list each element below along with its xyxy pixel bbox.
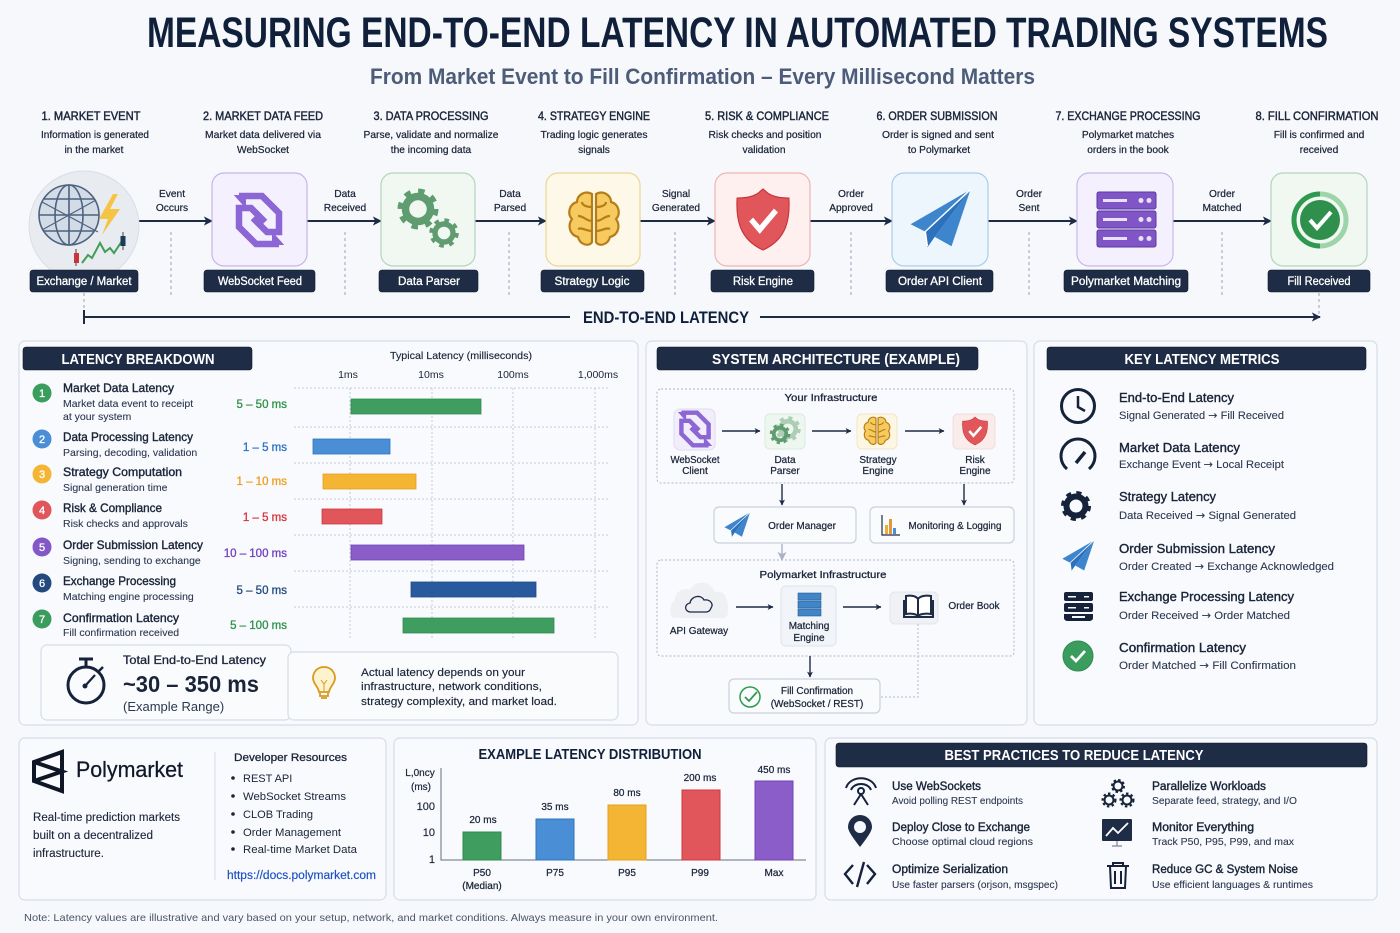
panel: key latency metrics	[1034, 341, 1377, 725]
flow arrows	[139, 220, 1271, 222]
node: websocket client: Client	[682, 466, 708, 477]
row: order submission latency: Signing, sending to exchange	[63, 555, 201, 567]
icon: stopwatch	[68, 659, 104, 703]
node labels: Strategy Logic	[554, 276, 630, 288]
chart tick labels: 100ms	[497, 369, 529, 381]
practice: reduce gc: Use efficient languages & runtimes	[1152, 879, 1313, 891]
node labels: Exchange / Market	[36, 276, 132, 288]
row: strategy computation: Signal generation time	[63, 482, 168, 494]
step 3 heading: the incoming data	[391, 145, 472, 156]
list: developer resources: CLOB Trading	[243, 809, 313, 821]
metric: market data	[1061, 439, 1284, 471]
row: data processing latency	[32, 430, 390, 459]
row: market data latency: 5 – 50 ms	[236, 399, 287, 411]
step 3 heading: Parse, validate and normalize	[364, 130, 499, 141]
step 2 heading	[203, 109, 323, 156]
node: api gateway: API Gateway	[670, 626, 728, 637]
row: market data latency: Market data event to receipt	[63, 398, 193, 410]
node: matching engine: Engine	[793, 633, 825, 644]
step 8 heading	[1256, 109, 1378, 156]
metric: end-to-end: Signal Generated → Fill Received	[1119, 409, 1284, 422]
icon tile: websocket	[212, 173, 307, 266]
bar chart: distribution: P50	[473, 868, 491, 879]
bar chart: distribution: 200 ms	[684, 773, 716, 784]
bar chart: distribution: P95	[618, 868, 636, 879]
node: fill confirmation	[729, 679, 880, 713]
node: api gateway	[670, 583, 728, 637]
panel: latency breakdown	[19, 341, 638, 725]
step 6 heading	[876, 109, 998, 156]
logo: polymarket	[34, 752, 184, 791]
node: risk engine	[953, 414, 995, 477]
row: exchange processing: 5 – 50 ms	[236, 585, 287, 597]
node labels: Polymarket Matching	[1071, 276, 1181, 288]
metric: market data: Market Data Latency	[1119, 441, 1241, 455]
step 5 heading	[705, 109, 829, 156]
node: data parser: Data	[774, 455, 796, 466]
row: risk and compliance: Risk & Compliance	[63, 501, 162, 515]
node: strategy engine: Strategy	[859, 455, 897, 466]
practice: monitor	[1102, 819, 1295, 848]
chart tick labels	[338, 369, 618, 381]
metric: order submission	[1062, 540, 1334, 573]
row: risk and compliance	[32, 500, 382, 530]
link: docs: https://docs.polymarket.com	[227, 870, 376, 882]
node: websocket client: WebSocket	[670, 455, 720, 466]
node: data parser	[765, 414, 805, 477]
icon tile: data parser gears	[381, 173, 475, 266]
step 8 heading: 8. FILL CONFIRMATION	[1256, 109, 1378, 123]
practice: serialization: Optimize Serialization	[892, 864, 1008, 876]
step 3 heading	[364, 109, 499, 156]
list: developer resources: Real-time Market Data	[243, 844, 358, 856]
icon tile: risk shield	[715, 173, 810, 266]
arrow labels: Event	[159, 189, 185, 200]
callout: latency note	[288, 652, 618, 720]
logo: polymarket: Polymarket	[76, 757, 184, 782]
step 5 heading: validation	[742, 145, 786, 156]
icon tile: fill check	[1271, 173, 1367, 266]
callout: latency note: infrastructure, network conditions,	[361, 681, 542, 693]
step 7 heading	[1056, 109, 1200, 156]
step 1 heading: Information is generated	[41, 130, 149, 141]
list: developer resources: Order Management	[243, 827, 341, 839]
step 4 heading: signals	[578, 145, 610, 156]
node: matching engine: Matching	[789, 621, 829, 632]
subtitle: From Market Event to Fill Confirmation – Every Millisecond Matters	[370, 64, 1035, 89]
step 2 heading: Market data delivered via	[205, 130, 321, 141]
row: data processing latency: 1 – 5 ms	[243, 442, 287, 454]
node: monitoring and logging	[870, 507, 1014, 543]
row: market data latency: 1	[39, 388, 45, 400]
step 5 heading: 5. RISK & COMPLIANCE	[705, 109, 829, 123]
bar chart: distribution: L,0ncy	[405, 768, 435, 779]
list: developer resources	[231, 752, 358, 856]
group: polymarket infrastructure: Polymarket Infrastructure	[760, 569, 887, 581]
practice: serialization	[845, 862, 1058, 891]
metric: end-to-end: End-to-End Latency	[1119, 391, 1235, 405]
node labels: Data Parser	[398, 276, 460, 288]
node: order manager: Order Manager	[768, 521, 837, 532]
bar chart: distribution: (Median)	[462, 881, 502, 892]
text: description	[33, 812, 180, 860]
step 1 heading	[41, 109, 149, 156]
heading: system architecture	[657, 347, 978, 370]
node: risk engine: Engine	[959, 466, 991, 477]
row: market data latency: at your system	[63, 411, 132, 423]
icon tile: matching server	[1077, 173, 1173, 266]
step 8 heading: Fill is confirmed and	[1274, 130, 1365, 141]
chart axis title: Typical Latency (milliseconds)	[390, 350, 532, 362]
step 7 heading: Polymarket matches	[1082, 130, 1174, 141]
node: data parser: Parser	[770, 466, 800, 477]
bar chart: distribution: 10	[423, 827, 435, 839]
arrow labels	[156, 189, 1242, 214]
callout: total latency: Total End-to-End Latency	[123, 653, 266, 667]
practice: monitor: Monitor Everything	[1152, 822, 1254, 834]
node: monitoring and logging: Monitoring & Logging	[908, 521, 1002, 532]
node labels: Fill Received	[1288, 276, 1350, 288]
node: websocket client	[670, 409, 720, 477]
row: data processing latency: 2	[39, 434, 45, 446]
row: confirmation latency: Confirmation Latency	[63, 611, 179, 625]
arrow labels: Order	[1016, 189, 1043, 200]
arrow labels: Approved	[829, 203, 873, 214]
node: matching engine	[781, 586, 836, 646]
chart tick labels: 1,000ms	[578, 369, 618, 381]
node: fill confirmation: (WebSocket / REST)	[771, 699, 863, 710]
row: confirmation latency: Fill confirmation received	[63, 627, 179, 639]
callout: total latency: (Example Range)	[123, 699, 224, 714]
node labels: WebSocket Feed	[218, 276, 302, 288]
text: description: built on a decentralized	[33, 830, 153, 842]
step 7 heading: orders in the book	[1087, 145, 1170, 156]
arrows	[736, 606, 881, 608]
arrow labels: Order	[838, 189, 865, 200]
row: strategy computation: 3	[39, 469, 45, 481]
practice: parallelize: Separate feed, strategy, and I/O	[1152, 795, 1297, 807]
chart tick labels: 10ms	[418, 369, 444, 381]
icon tile: strategy brain	[546, 173, 640, 266]
row: order submission latency: 10 – 100 ms	[224, 548, 287, 560]
bar chart: distribution: 20 ms	[469, 815, 497, 826]
metric: strategy	[1063, 490, 1296, 522]
practice: monitor: Track P50, P95, P99, and max	[1152, 836, 1295, 848]
list: developer resources: WebSocket Streams	[243, 791, 347, 803]
row: risk and compliance: 1 – 5 ms	[243, 512, 287, 524]
heading: best practices: BEST PRACTICES TO REDUCE LATENCY	[944, 748, 1204, 764]
arrows into services	[782, 484, 964, 505]
heading: latency breakdown	[23, 347, 252, 370]
arrow labels: Matched	[1202, 203, 1242, 214]
practice: deploy close: Choose optimal cloud regions	[892, 836, 1033, 848]
practice: websockets	[846, 778, 1023, 807]
callout: latency note: Actual latency depends on your	[361, 667, 525, 679]
callout: latency note: strategy complexity, and market load.	[361, 696, 557, 708]
panel: polymarket resources	[19, 738, 386, 900]
row: data processing latency: Parsing, decoding, validation	[63, 447, 197, 459]
icon: exchange globe	[29, 171, 139, 281]
arrow labels: Data	[334, 189, 356, 200]
bar chart: distribution	[405, 765, 806, 892]
practice: deploy close: Deploy Close to Exchange	[892, 822, 1030, 834]
row: confirmation latency: 7	[39, 614, 45, 626]
row: exchange processing: Matching engine processing	[63, 591, 194, 603]
panel: latency distribution	[394, 738, 816, 900]
bar chart: distribution: 35 ms	[541, 802, 569, 813]
step 6 heading: 6. ORDER SUBMISSION	[876, 109, 998, 123]
row: strategy computation	[32, 464, 416, 494]
metric: confirmation	[1063, 641, 1296, 672]
group: polymarket infrastructure	[657, 560, 1014, 656]
metric: order submission: Order Created → Exchange Acknowledged	[1119, 560, 1334, 573]
row: data processing latency: Data Processing Latency	[63, 430, 193, 444]
step 3 heading: 3. DATA PROCESSING	[374, 109, 488, 123]
step 5 heading: Risk checks and position	[708, 130, 822, 141]
dotted return line	[880, 624, 918, 697]
practice: reduce gc	[1107, 863, 1313, 891]
pipeline: latency steps	[29, 109, 1378, 327]
heading: key latency metrics	[1047, 347, 1366, 370]
node: order manager	[714, 507, 856, 543]
row: exchange processing	[32, 574, 536, 603]
practice: serialization: Use faster parsers (orjson, msgspec)	[892, 879, 1058, 891]
bar chart: distribution: P75	[546, 868, 564, 879]
arrow labels: Received	[324, 203, 367, 214]
heading: system architecture: SYSTEM ARCHITECTURE (EXAMPLE)	[712, 352, 960, 368]
metric: strategy: Strategy Latency	[1119, 490, 1217, 504]
bar chart: distribution: 100	[417, 801, 435, 813]
row: confirmation latency: 5 – 100 ms	[230, 620, 287, 632]
node: fill confirmation: Fill Confirmation	[781, 686, 853, 697]
dashed guide lines	[84, 232, 1319, 318]
panel: best practices	[825, 738, 1377, 900]
heading: key latency metrics: KEY LATENCY METRICS	[1124, 352, 1280, 368]
node: strategy engine	[857, 414, 897, 477]
node labels	[30, 270, 1370, 292]
end-to-end latency span arrow: END-TO-END LATENCY	[583, 308, 750, 327]
row: exchange processing: 6	[39, 578, 45, 590]
bar chart: distribution: (ms)	[411, 782, 431, 793]
metric: exchange processing	[1064, 590, 1295, 622]
metric: order submission: Order Submission Latency	[1119, 542, 1276, 556]
node: strategy engine: Engine	[862, 466, 894, 477]
node: order book	[890, 592, 1001, 624]
callout: total latency: ~30 – 350 ms	[123, 671, 259, 697]
practice: deploy close	[848, 815, 1033, 848]
practice: websockets: Avoid polling REST endpoints	[892, 795, 1023, 807]
step 2 heading: WebSocket	[237, 145, 289, 156]
arrows	[722, 430, 944, 432]
chart tick labels: 1ms	[338, 369, 358, 381]
metric: confirmation: Order Matched → Fill Confirmation	[1119, 659, 1296, 672]
callout: total latency	[41, 645, 291, 720]
icon: light bulb	[313, 667, 335, 698]
bar chart: distribution: 1	[429, 854, 435, 866]
heading: distribution: EXAMPLE LATENCY DISTRIBUTION	[478, 746, 702, 763]
bar chart: distribution: P99	[691, 868, 709, 879]
row: market data latency	[32, 381, 481, 423]
metric: market data: Exchange Event → Local Receipt	[1119, 458, 1284, 471]
row: confirmation latency	[32, 610, 554, 639]
arrow labels: Generated	[652, 203, 700, 214]
metric: end-to-end	[1062, 390, 1284, 422]
arrow labels: Sent	[1019, 203, 1040, 214]
bar chart: distribution: 80 ms	[613, 788, 641, 799]
node: risk engine: Risk	[965, 455, 986, 466]
row: risk and compliance: Risk checks and approvals	[63, 518, 188, 530]
arrow labels: Parsed	[494, 203, 526, 214]
practice: parallelize: Parallelize Workloads	[1152, 781, 1266, 793]
row: order submission latency: 5	[39, 542, 45, 554]
step 4 heading	[538, 109, 650, 156]
metric: confirmation: Confirmation Latency	[1119, 641, 1247, 655]
bar chart: distribution: Max	[765, 868, 783, 879]
row: market data latency: Market Data Latency	[63, 381, 174, 395]
group: your infrastructure: Your Infrastructure	[784, 392, 878, 404]
row: order submission latency	[32, 538, 524, 567]
list: developer resources: Developer Resources	[234, 752, 348, 764]
row: risk and compliance: 4	[39, 505, 45, 517]
node: order book: Order Book	[948, 601, 1001, 612]
chart grid	[294, 388, 610, 640]
practice: parallelize	[1102, 780, 1297, 807]
metric: exchange processing: Exchange Processing Latency	[1119, 590, 1295, 604]
bar chart: distribution: 450 ms	[758, 765, 790, 776]
node labels: Order API Client	[898, 276, 983, 288]
arrow to polymarket	[781, 544, 783, 560]
practice: reduce gc: Reduce GC & System Noise	[1152, 864, 1298, 876]
step 6 heading: to Polymarket	[908, 145, 970, 156]
panel: system architecture	[646, 341, 1027, 725]
step 4 heading: 4. STRATEGY ENGINE	[538, 109, 650, 123]
arrow labels: Occurs	[156, 203, 188, 214]
text: description: Real-time prediction markets	[33, 812, 180, 824]
footnote: Note: Latency values are illustrative and vary based on your setup, network, and market conditions. Always measure in your own environment.	[24, 912, 718, 924]
heading: best practices	[836, 743, 1367, 767]
icon tile: order plane	[892, 173, 988, 266]
arrow labels: Data	[499, 189, 521, 200]
node labels: Risk Engine	[733, 276, 793, 288]
step 2 heading: 2. MARKET DATA FEED	[203, 109, 323, 123]
group: your infrastructure	[657, 389, 1014, 483]
practice: websockets: Use WebSockets	[892, 781, 981, 793]
list: developer resources: REST API	[243, 773, 292, 785]
metric: exchange processing: Order Received → Order Matched	[1119, 609, 1290, 622]
row: strategy computation: 1 – 10 ms	[236, 476, 287, 488]
text: description: infrastructure.	[33, 848, 104, 860]
step 6 heading: Order is signed and sent	[882, 130, 994, 141]
step 1 heading: 1. MARKET EVENT	[42, 109, 141, 123]
row: exchange processing: Exchange Processing	[63, 574, 176, 588]
arrow labels: Signal	[662, 189, 690, 200]
metric: strategy: Data Received → Signal Generated	[1119, 509, 1296, 522]
step 4 heading: Trading logic generates	[540, 130, 648, 141]
step 7 heading: 7. EXCHANGE PROCESSING	[1056, 109, 1200, 123]
step 1 heading: in the market	[65, 145, 124, 156]
step 8 heading: received	[1300, 145, 1339, 156]
row: strategy computation: Strategy Computation	[63, 465, 182, 479]
arrow to fill confirmation	[809, 656, 811, 677]
arrow labels: Order	[1209, 189, 1236, 200]
row: order submission latency: Order Submission Latency	[63, 538, 203, 552]
heading: latency breakdown: LATENCY BREAKDOWN	[62, 352, 214, 368]
